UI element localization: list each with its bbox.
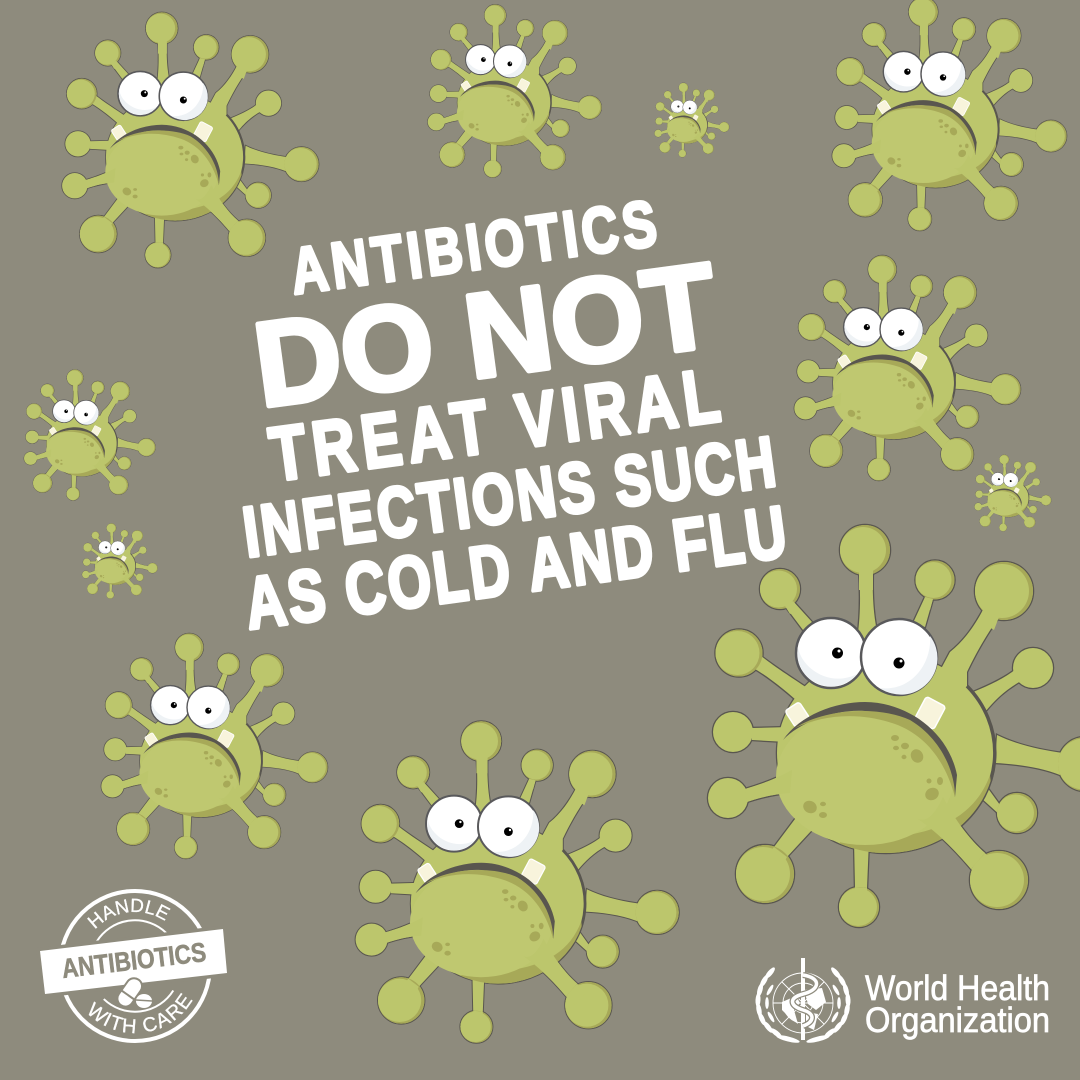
stamp: handle antibiotics with care: ANTIBIOTICS	[60, 937, 208, 984]
virus: tiny top	[654, 83, 729, 157]
WHO name	[865, 969, 1050, 1040]
virus: tiny right	[974, 455, 1051, 531]
virus: tiny left	[82, 523, 158, 599]
WHO name: World Health	[865, 969, 1050, 1008]
headline: TREAT VIRAL	[265, 353, 725, 498]
headline: ANTIBIOTICS	[286, 187, 661, 308]
WHO name: Organization	[865, 1001, 1050, 1040]
WHO emblem	[755, 958, 851, 1044]
virus: large lower right	[708, 525, 1080, 927]
icon: pills	[114, 975, 152, 1010]
headline: INFECTIONS SUCH	[239, 423, 780, 573]
virus: top left	[62, 12, 319, 268]
stamp: handle antibiotics with care: WITH CARE	[88, 992, 193, 1034]
virus: right middle	[794, 255, 1021, 481]
headline: AS COLD AND FLU	[240, 490, 791, 645]
virus: top middle	[428, 5, 601, 177]
virus: left	[24, 370, 155, 500]
stamp: handle antibiotics with care: HANDLE	[87, 898, 170, 929]
icon: laurel wreath	[755, 966, 851, 1044]
virus: lower left	[101, 633, 328, 859]
headline	[239, 187, 791, 645]
virus: top right	[832, 0, 1067, 231]
virus: bottom centre	[356, 721, 679, 1043]
headline: DO NOT	[247, 238, 724, 433]
stamp: handle antibiotics with care	[40, 889, 227, 1043]
